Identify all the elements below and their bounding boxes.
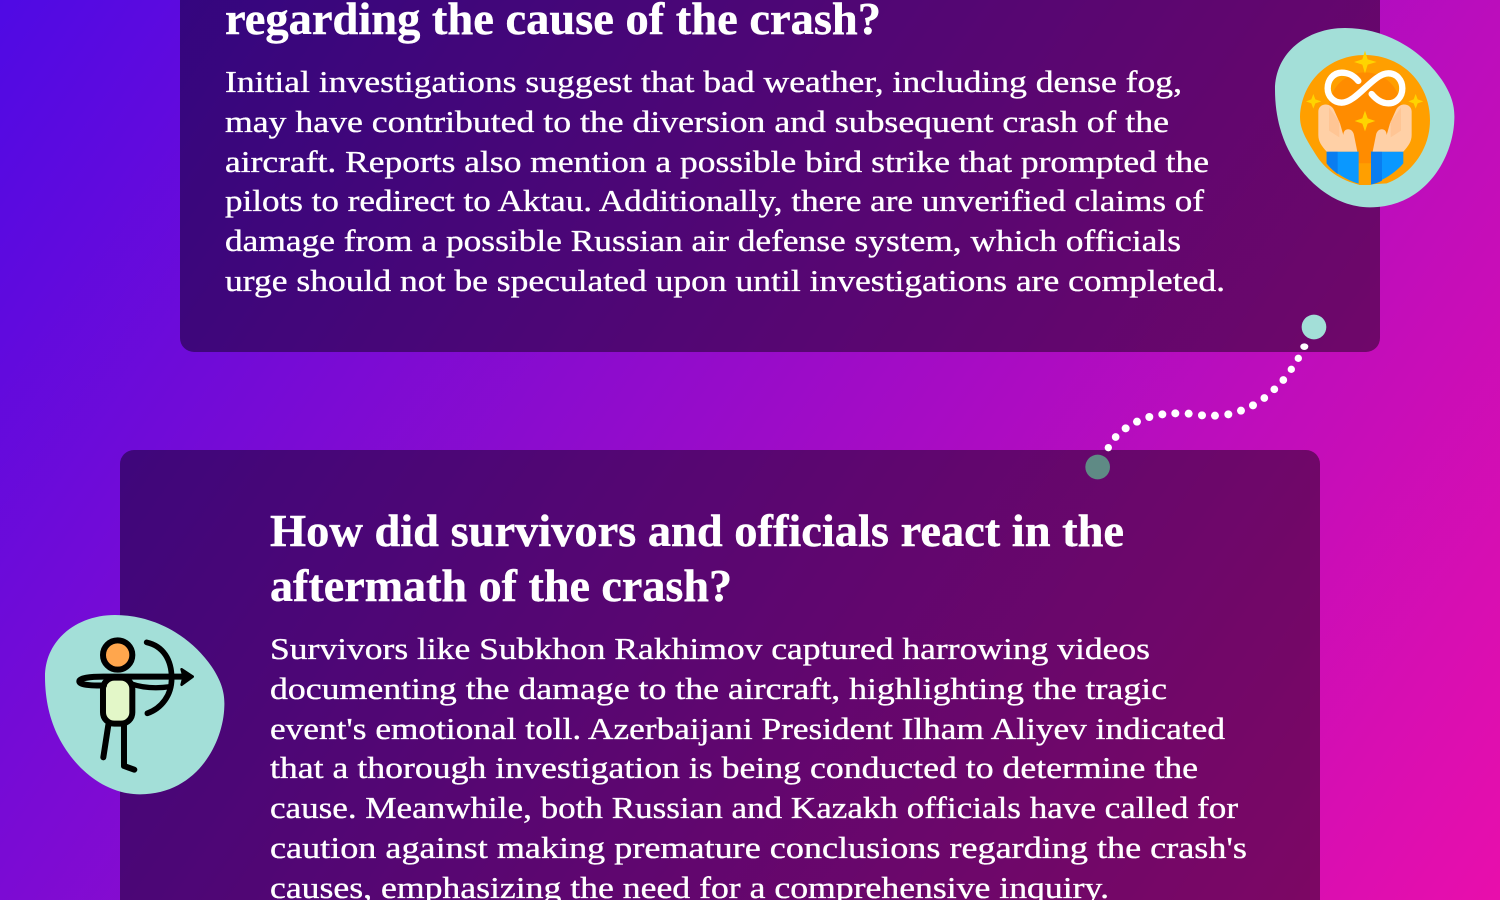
icon blob background	[1275, 28, 1454, 207]
icon: archer	[45, 615, 224, 794]
text block: reactions answer: Survivors like Subkhon Rakhimov captured harrowing videos	[270, 631, 1150, 666]
heading: reactions: How did survivors and officials react in the	[270, 505, 1124, 556]
card background: cause	[180, 0, 1380, 352]
panel: reactions	[120, 450, 1320, 900]
text block: cause answer: urge should not be speculated upon until investigations are completed.	[225, 263, 1225, 298]
icon blob background	[45, 615, 224, 794]
text block: cause answer: may have contributed to the diversion and subsequent crash of the	[225, 104, 1169, 139]
text block: reactions answer: caution against making premature conclusions regarding the crash's	[270, 830, 1247, 865]
text block: reactions answer: that a thorough investigation is being conducted to determine the	[270, 750, 1198, 785]
text block: cause answer	[225, 64, 1225, 298]
text block: reactions answer	[270, 631, 1247, 900]
icon: hands holding infinity	[1275, 28, 1454, 207]
text block: cause answer: damage from a possible Russian air defense system, which officials	[225, 223, 1181, 258]
heading: reactions	[270, 505, 1124, 611]
text block: cause answer: pilots to redirect to Aktau. Additionally, there are unverified claims of	[225, 183, 1205, 218]
text block: reactions answer: event's emotional toll. Azerbaijani President Ilham Aliyev indicated	[270, 711, 1226, 746]
panel: cause of the crash	[180, 0, 1380, 352]
arrow: dotted connector	[1085, 315, 1326, 479]
heading: reactions: aftermath of the crash?	[270, 560, 732, 611]
text block: cause answer: Initial investigations suggest that bad weather, including dense fog,	[225, 64, 1182, 99]
text block: reactions answer: documenting the damage to the aircraft, highlighting the tragic	[270, 671, 1167, 706]
text block: cause answer: aircraft. Reports also mention a possible bird strike that prompted the	[225, 144, 1209, 179]
text block: reactions answer: cause. Meanwhile, both Russian and Kazakh officials have called for	[270, 790, 1239, 825]
card background: reactions	[120, 450, 1320, 900]
